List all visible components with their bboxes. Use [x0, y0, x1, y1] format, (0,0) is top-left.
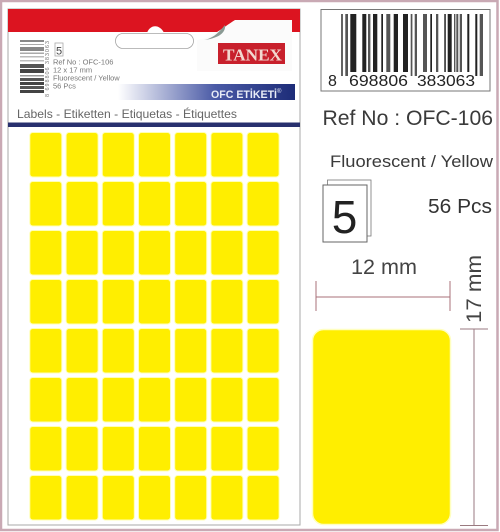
height label: 17 mm: [463, 255, 486, 323]
blue banner: OFC Etiketi: ®: [277, 88, 282, 95]
large yellow sample label: [312, 330, 450, 524]
blue banner: OFC Etiketi: [118, 84, 295, 101]
colour name: Fluorescent / Yellow: [330, 153, 493, 171]
pack details text: 12 x 17 mm: [53, 66, 92, 74]
height dimension line: [460, 329, 488, 526]
blue banner: OFC Etiketi: OFC ETİKETİ: [211, 88, 277, 101]
reference number: Ref No : OFC-106: [322, 107, 493, 130]
barcode digits: [328, 73, 475, 90]
pack count box: 5: [56, 46, 62, 58]
barcode digits: 698806: [349, 73, 408, 90]
pack details text: 56 Pcs: [53, 82, 76, 90]
barcode digits: 8: [328, 73, 337, 90]
piece count: 56 Pcs: [428, 196, 492, 218]
red header band: [8, 9, 300, 33]
pack count box: [55, 43, 63, 58]
barcode box: [321, 10, 490, 91]
icon: pack of 5: [323, 180, 371, 243]
folded white corner with logo: [197, 20, 292, 71]
barcode digits: 383063: [417, 73, 475, 90]
barcode bars: [341, 14, 483, 76]
pack details text: Fluorescent / Yellow: [53, 74, 120, 82]
logo: Tanex: TANEX: [223, 46, 283, 64]
panel: label sheet: [8, 9, 300, 525]
pack details text: [53, 58, 120, 90]
hang hole: [116, 34, 194, 48]
pack details text: Ref No : OFC-106: [53, 58, 113, 66]
width label: 12 mm: [351, 256, 417, 279]
icon: pack of 5: 5: [332, 191, 357, 243]
width dimension line: [316, 281, 450, 311]
small barcode on pack: 8 698806 383063: [45, 41, 51, 97]
languages heading: Labels - Etiketten - Etiquetas - Étiquettes: [17, 106, 237, 121]
small barcode on pack: [20, 40, 51, 97]
navy stripe: [8, 122, 300, 127]
label grid: 7 x 8 yellow stickers: [30, 133, 279, 520]
